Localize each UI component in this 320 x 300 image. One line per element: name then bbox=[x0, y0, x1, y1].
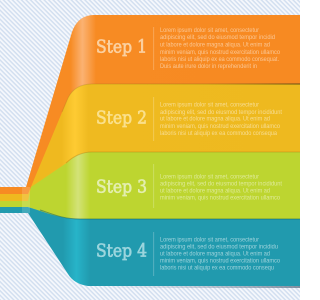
step 2 label: Step 2 bbox=[96, 108, 147, 128]
divider and text block: step 2: adipiscing elit, sed do eiusmod tempor incididunt bbox=[160, 109, 282, 116]
divider and text block: step 4: Lorem ipsum dolor sit amet, consectetur bbox=[160, 236, 260, 244]
shadow under teal band bbox=[100, 286, 300, 288]
divider and text block: step 2: laboris nisi ut aliquip ex ea commodo consequa bbox=[160, 130, 277, 137]
band: step 2 yellow bbox=[0, 84, 300, 201]
band shape: green bbox=[0, 152, 300, 225]
divider and text block: step 2: ut labore et dolore magna aliqua. Ut enim ad bbox=[160, 116, 270, 122]
divider and text block: step 3: Lorem ipsum dolor sit amet, consectetur bbox=[160, 174, 260, 180]
band shape: teal bbox=[0, 207, 300, 286]
step 4 label: Step 4 bbox=[96, 240, 147, 262]
divider and text block: step 1: ut labore et dolore magna aliqua. Ut enim ad bbox=[160, 42, 270, 48]
divider and text block: step 3: ut labore et dolore magna aliqua. Ut enim ad bbox=[160, 188, 270, 194]
yellow top edge shadow bbox=[62, 84, 300, 112]
teal top edge shadow bbox=[40, 210, 300, 219]
junction highlight on strips bbox=[22, 187, 30, 213]
divider and text block: step 4: ut labore et dolore magna aliqua. Ut enim ad bbox=[160, 250, 270, 258]
divider and text block: step 2 bbox=[153, 97, 282, 141]
divider and text block: step 3: adipiscing elit, sed do eiusmod tempor incididunt bbox=[160, 180, 282, 188]
divider and text block: step 4: minim veniam, quis nostrud exercitation ullamco bbox=[160, 258, 280, 264]
band shape: orange bbox=[0, 15, 300, 194]
band: step 1 orange bbox=[0, 15, 300, 194]
divider and text block: step 4 bbox=[153, 232, 280, 276]
band: step 3 green bbox=[0, 152, 300, 225]
divider and text block: step 1: adipiscing elit, sed do eiusmod tempor incidid bbox=[160, 34, 275, 41]
divider and text block: step 4: adipiscing elit, sed do eiusmod tempor incididu bbox=[160, 244, 278, 250]
divider and text block: step 2: Lorem ipsum dolor sit amet, consectetur bbox=[160, 102, 260, 108]
step 3 label: Step 3 bbox=[96, 176, 147, 198]
divider and text block: step 4: laboris nisi ut aliquip ex ea commodo consequ bbox=[160, 264, 274, 272]
band shape: yellow bbox=[0, 84, 300, 201]
band: step 4 teal bbox=[0, 207, 300, 286]
step 1 label: Step 1 bbox=[96, 36, 147, 58]
divider and text block: step 3 bbox=[153, 164, 282, 208]
divider and text block: step 1: minim veniam, quis nostrud exercitation ullamco bbox=[160, 49, 280, 56]
divider and text block: step 1 bbox=[153, 27, 280, 70]
divider and text block: step 3: minim veniam, quis nostrud exercitation ullamco bbox=[160, 194, 280, 202]
divider and text block: step 1: Lorem ipsum dolor sit amet, consectetur bbox=[160, 27, 260, 34]
green top edge shadow bbox=[66, 152, 300, 163]
divider and text block: step 1: Duis aute irure dolor in reprehenderit in bbox=[160, 63, 257, 70]
divider and text block: step 2: minim veniam, quis nostrud exercitation ullamco bbox=[160, 123, 280, 130]
divider and text block: step 1: laboris nisi ut aliquip ex ea commodo consequat. bbox=[160, 56, 279, 63]
